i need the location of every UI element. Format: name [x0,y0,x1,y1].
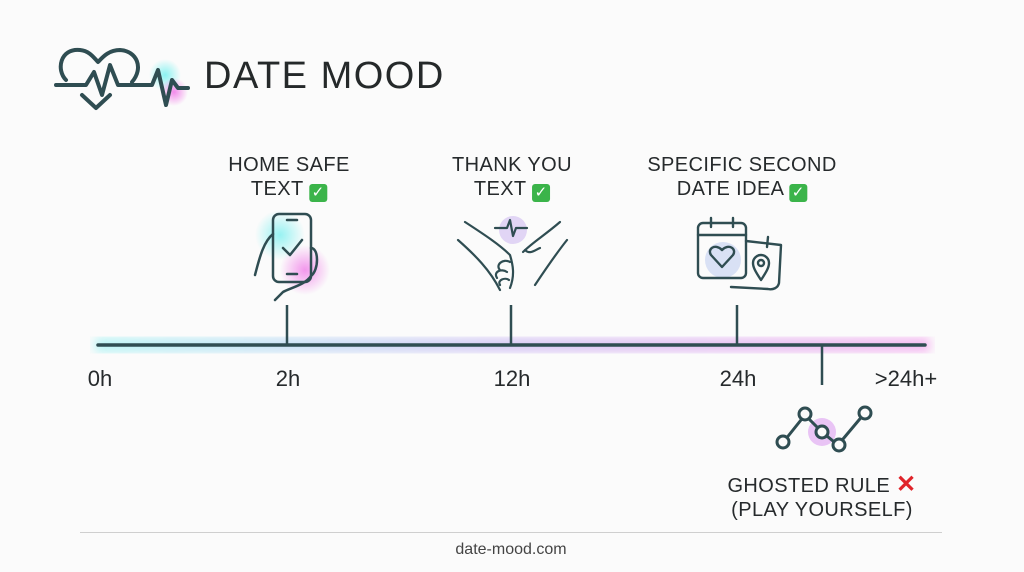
ghosted rule label: (PLAY YOURSELF) [731,499,913,521]
icon: holding hands [456,216,568,292]
icon: ghosted zigzag [776,406,872,452]
milestone: home safe text: HOME SAFE [228,154,350,176]
footer [80,532,942,563]
milestone: thank you text: THANK YOU [452,154,572,176]
ghosted rule label: GHOSTED RULE ✕ [727,471,917,498]
time labels [88,366,937,391]
milestone: thank you text: TEXT [474,178,526,200]
icon: phone [254,212,328,302]
milestone: specific second date idea [647,154,837,202]
milestone: specific second date idea: DATE IDEA [677,178,783,200]
milestone: thank you text: ✓ [535,184,548,201]
icon: heart pulse [54,48,190,110]
title: DATE MOOD [204,55,445,97]
milestone: home safe text: TEXT [251,178,303,200]
milestone: home safe text: ✓ [312,184,325,201]
time labels: 24h [720,366,756,391]
time labels: 0h [88,366,112,391]
milestone: home safe text [228,154,350,202]
milestone: thank you text [452,154,572,202]
time labels: >24h+ [875,366,937,391]
milestone: specific second date idea: ✓ [792,184,805,201]
logo [54,48,445,110]
milestone: specific second date idea: SPECIFIC SECOND [647,154,837,176]
time labels: 2h [276,366,300,391]
footer: date-mood.com [455,541,567,558]
ghosted rule label [727,471,917,521]
timeline [90,305,935,385]
icon: calendars [696,216,782,290]
time labels: 12h [494,366,530,391]
